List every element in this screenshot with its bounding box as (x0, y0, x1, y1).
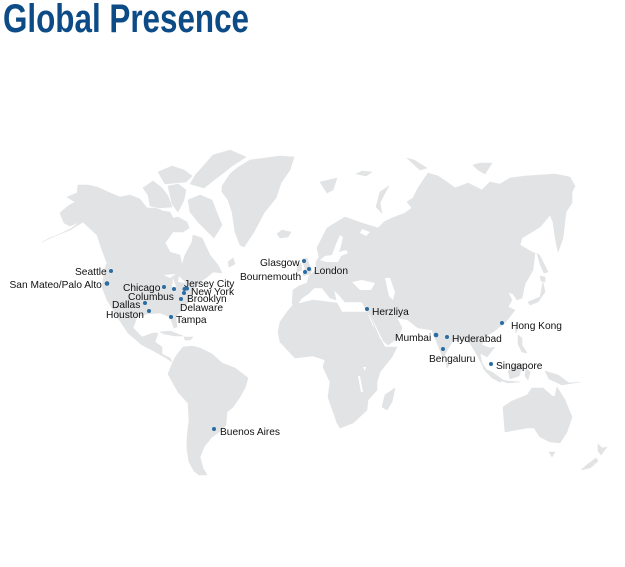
Ireland (297, 263, 302, 272)
Cuba and Caribbean (160, 331, 193, 340)
Arctic islands (320, 158, 492, 193)
Sri Lanka (446, 362, 449, 368)
Caspian Sea (385, 278, 395, 300)
world map (42, 150, 607, 475)
Sakhalin (537, 253, 548, 273)
location: Columbus (128, 287, 176, 303)
Black Sea (352, 280, 375, 290)
Great Lakes (164, 274, 186, 288)
Queen Elizabeth Islands (158, 166, 192, 184)
location: Jersey City: Jersey City (184, 279, 235, 290)
Africa (278, 300, 397, 428)
location: Brooklyn: Brooklyn (187, 294, 227, 305)
Baffin Island (188, 195, 222, 238)
location: Bengaluru (429, 347, 475, 365)
Baltic Sea (320, 235, 348, 262)
New Zealand (581, 444, 607, 470)
Eurasia (292, 173, 575, 375)
location: Herzliya: Herzliya (372, 307, 409, 318)
location: Bournemouth: Bournemouth (240, 272, 301, 283)
location: London: London (314, 266, 348, 277)
location: San Mateo/Palo Alto: San Mateo/Palo Alto (10, 280, 102, 291)
Newfoundland (228, 258, 235, 267)
location: Delaware (179, 297, 223, 314)
Ellesmere Island (190, 150, 246, 188)
Iceland (277, 230, 291, 238)
location: Glasgow: Glasgow (260, 258, 300, 269)
Red Sea (369, 312, 385, 345)
location: Chicago: Chicago (123, 283, 161, 294)
Indonesia and New Guinea (483, 364, 580, 385)
African lakes (358, 367, 366, 392)
location: Columbus: Columbus (128, 292, 174, 303)
Philippines and Taiwan (515, 327, 527, 353)
North America (42, 185, 222, 362)
Novaya Zemlya (376, 186, 389, 213)
location: Brooklyn (182, 291, 227, 305)
location: Bengaluru: Bengaluru (429, 354, 475, 365)
location: Delaware: Delaware (180, 303, 223, 314)
Japan (528, 276, 545, 305)
location: Buenos Aires: Buenos Aires (220, 427, 280, 438)
location: Dallas: Dallas (112, 300, 140, 311)
location: Singapore: Singapore (496, 361, 543, 372)
Tasmania (549, 452, 555, 457)
location: New York: New York (191, 287, 235, 298)
Victoria Island (143, 181, 172, 208)
Great Britain (303, 258, 312, 276)
Somerset and Prince of Wales Islands (168, 184, 186, 212)
White Sea (360, 229, 370, 236)
Australia (503, 387, 572, 443)
location: Mumbai: Mumbai (395, 333, 431, 344)
South America (168, 346, 248, 475)
location: Houston: Houston (106, 310, 144, 321)
Madagascar (382, 388, 395, 410)
Greenland (222, 156, 294, 247)
location: Seattle: Seattle (75, 267, 107, 278)
inland waters (164, 229, 395, 392)
location: Tampa: Tampa (176, 315, 207, 326)
location: Hyderabad: Hyderabad (452, 334, 502, 345)
location: Hong Kong: Hong Kong (511, 321, 562, 332)
